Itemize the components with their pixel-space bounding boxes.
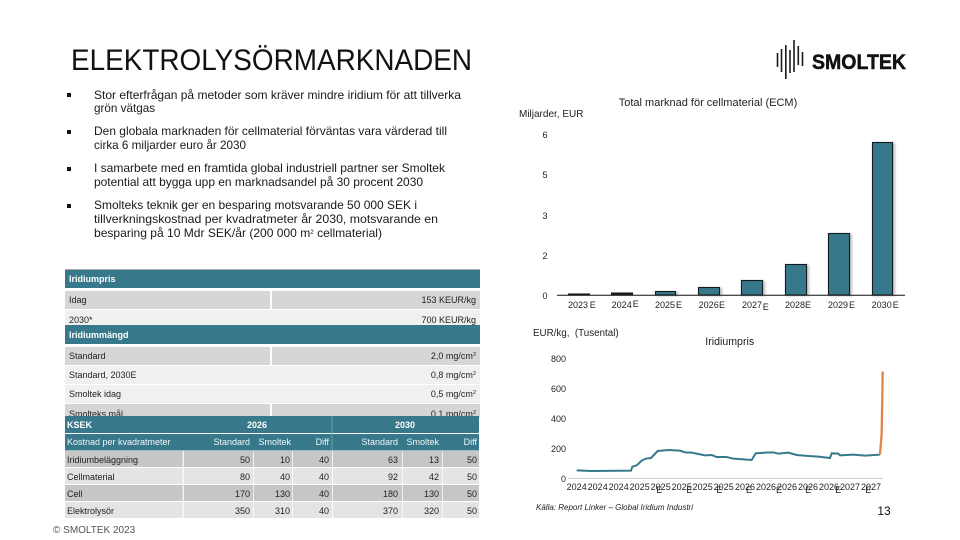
row: Elektrolysör: 310 <box>275 506 290 516</box>
y axis labels: 800 <box>551 354 566 364</box>
table: KSEK cost per square metre: 2030 <box>395 420 415 430</box>
x axis labels: E <box>805 485 811 495</box>
row: Iridiumbeläggning: 10 <box>280 455 290 465</box>
table: Iridiummängd: 2,0 mg/cm <box>431 351 473 361</box>
bullet list: potential att bygga upp en marknadsandel på 30 procent 2030 <box>94 176 424 189</box>
logo: Smoltek: SMOLTEK <box>812 50 906 74</box>
table: KSEK cost per square metre <box>65 416 479 518</box>
x axis labels: 2026 <box>819 482 839 492</box>
x axis labels: E <box>805 300 811 310</box>
title: ELEKTROLYSÖRMARKNADEN <box>71 44 472 77</box>
x axis labels: 2025 <box>630 482 650 492</box>
y axis labels: 6 <box>542 130 548 140</box>
row: Cell: 50 <box>467 489 477 499</box>
row: Elektrolysör: 350 <box>235 506 250 516</box>
x axis labels: 2026 <box>735 482 755 492</box>
table: KSEK cost per square metre: Kostnad per kvadratmeter <box>67 437 171 447</box>
x axis labels: E <box>716 485 722 495</box>
orange forecast line <box>880 372 883 455</box>
row: Cell <box>65 485 479 501</box>
table: KSEK cost per square metre: Standard <box>361 437 398 447</box>
table: Iridiummängd: 0,1 mg/cm <box>431 409 473 419</box>
x axis <box>557 294 905 296</box>
x axis labels: 2026 <box>777 482 797 492</box>
y axis labels: 5 <box>542 170 548 180</box>
row: Iridiumbeläggning: 50 <box>467 455 477 465</box>
table: Iridiumpris: Idag <box>69 295 87 305</box>
x axis labels: 2024 <box>588 482 608 492</box>
x axis labels: 2024 <box>567 482 587 492</box>
x axis labels: E <box>865 485 871 495</box>
y axis labels: 200 <box>551 444 566 454</box>
table: Iridiummängd: Iridiummängd <box>69 330 129 340</box>
row: Iridiumbeläggning: 63 <box>388 455 398 465</box>
y axis labels: 0 <box>542 291 548 301</box>
row: Iridiumbeläggning <box>65 451 479 467</box>
table: Iridiummängd: 0,8 mg/cm <box>431 370 473 380</box>
x axis labels: 2025 <box>714 482 734 492</box>
x axis labels: E <box>719 300 725 310</box>
row: Cellmaterial <box>65 468 479 484</box>
table: Iridiumpris: 2030* <box>69 315 93 325</box>
x axis labels: 2024 <box>609 482 629 492</box>
x axis labels: 2025 <box>655 300 675 310</box>
bar chart: total market for cell material <box>519 97 905 312</box>
row: Iridiumbeläggning: 50 <box>240 455 250 465</box>
bullet list: Smolteks teknik ger en besparing motsvarande 50 000 SEK i <box>94 199 417 212</box>
table: Iridiummängd: Standard <box>69 351 106 361</box>
x axis labels: 2026 <box>699 300 719 310</box>
row: Cell: 130 <box>424 489 439 499</box>
line chart: iridium price <box>533 328 883 495</box>
y axis labels: 3 <box>542 211 548 221</box>
bullet list: Den globala marknaden för cellmaterial förväntas vara värderad till <box>94 125 447 138</box>
y axis unit: Miljarder, EUR <box>519 109 583 120</box>
row: Cellmaterial: Cellmaterial <box>67 472 115 482</box>
row: Iridiumbeläggning: 40 <box>319 455 329 465</box>
x axis labels: E <box>776 485 782 495</box>
row: Iridiumbeläggning: 13 <box>429 455 439 465</box>
table: Iridiummängd: Smoltek idag <box>69 389 121 399</box>
x axis labels: 2027 <box>861 482 881 492</box>
table: Iridiummängd: 2 <box>473 352 476 358</box>
x axis <box>568 478 883 480</box>
chart title: Total marknad för cellmaterial (ECM) <box>619 97 797 109</box>
row: Elektrolysör: 320 <box>424 506 439 516</box>
x axis labels: E <box>763 302 769 312</box>
row: Cellmaterial: 50 <box>467 472 477 482</box>
y axis labels <box>551 354 566 484</box>
bar shadows <box>656 143 895 296</box>
row: Cell: 170 <box>235 489 250 499</box>
x axis labels: E <box>849 300 855 310</box>
bullet list: tillverkningskostnad per kvadratmeter år 2030, motsvarande en <box>94 213 438 226</box>
row: Cell: 40 <box>319 489 329 499</box>
table: KSEK cost per square metre: Diff <box>316 437 329 447</box>
table: KSEK cost per square metre: 2026 <box>247 420 267 430</box>
source note: Källa: Report Linker – Global Iridium Industri <box>536 503 693 512</box>
x axis labels: 2026 <box>798 482 818 492</box>
x axis labels: 2028 <box>785 300 805 310</box>
table: Iridiummängd: 2 <box>473 410 476 416</box>
row: Elektrolysör <box>65 502 479 518</box>
row: Cellmaterial: 40 <box>319 472 329 482</box>
x axis labels: 2027 <box>840 482 860 492</box>
x axis labels: 2024 <box>612 300 632 310</box>
table: Iridiummängd: 0,5 mg/cm <box>431 389 473 399</box>
y axis labels: 0 <box>561 474 566 484</box>
x axis labels: 2023 <box>568 300 588 310</box>
y axis labels <box>542 130 548 301</box>
table: KSEK cost per square metre: Diff <box>464 437 477 447</box>
x axis labels: E <box>686 485 692 495</box>
bullet list: I samarbete med en framtida global industriell partner ser Smoltek <box>94 162 445 175</box>
x axis labels: E <box>893 300 899 310</box>
x axis labels: E <box>633 299 639 309</box>
table: KSEK cost per square metre: KSEK <box>67 420 93 430</box>
bullet list: 2 <box>310 230 314 236</box>
row: Elektrolysör: 370 <box>383 506 398 516</box>
x axis labels: 2027 <box>742 300 762 310</box>
row: Elektrolysör: 40 <box>319 506 329 516</box>
x axis labels: 2025 <box>672 482 692 492</box>
bullet list: besparing på 10 Mdr SEK/år (200 000 m <box>94 227 304 240</box>
row: Cellmaterial: 92 <box>388 472 398 482</box>
x axis labels: 2025 <box>651 482 671 492</box>
table: Iridiummängd <box>65 325 480 419</box>
x axis labels: E <box>746 485 752 495</box>
row: Cell: Cell <box>67 489 83 499</box>
table: Iridiummängd: 2 <box>473 390 476 396</box>
page number: 13 <box>877 504 891 518</box>
table: Iridiummängd: Smolteks mål <box>69 409 123 419</box>
table: KSEK cost per square metre: Smoltek <box>258 437 291 447</box>
row: Elektrolysör: 50 <box>467 506 477 516</box>
x axis labels: 2026 <box>756 482 776 492</box>
row: Cellmaterial: 40 <box>280 472 290 482</box>
x axis labels: E <box>656 485 662 495</box>
bullet list <box>67 89 461 240</box>
bullet list: cellmaterial) <box>314 227 382 240</box>
bars <box>568 142 892 295</box>
x axis labels: 2025 <box>693 482 713 492</box>
row: Iridiumbeläggning: Iridiumbeläggning <box>67 455 138 465</box>
bullet list: cirka 6 miljarder euro år 2030 <box>94 139 247 152</box>
x axis labels: E <box>590 300 596 310</box>
row: Cell: 180 <box>383 489 398 499</box>
table: Iridiummängd: 2 <box>473 371 476 377</box>
copyright footer: © SMOLTEK 2023 <box>53 525 136 536</box>
table: Iridiumpris: 700 KEUR/kg <box>421 315 476 325</box>
y axis unit: EUR/kg, (Tusental) <box>533 328 619 339</box>
teal price line <box>577 450 880 471</box>
x axis labels <box>568 299 899 312</box>
x axis labels <box>567 482 881 495</box>
x axis labels: E <box>835 485 841 495</box>
y axis labels: 400 <box>551 414 566 424</box>
bullet list: grön vätgas <box>94 102 155 115</box>
row: Cellmaterial: 80 <box>240 472 250 482</box>
table: Iridiumpris: 153 KEUR/kg <box>421 295 476 305</box>
table: KSEK cost per square metre: Standard <box>213 437 250 447</box>
row: Elektrolysör: Elektrolysör <box>67 506 114 516</box>
logo: Smoltek <box>778 40 906 79</box>
table: Iridiumpris <box>65 269 480 326</box>
chart title: Iridiumpris <box>705 336 754 348</box>
y axis labels: 600 <box>551 384 566 394</box>
row: Cellmaterial: 42 <box>429 472 439 482</box>
table: Iridiummängd: Standard, 2030E <box>69 370 137 380</box>
y axis labels: 2 <box>542 251 548 261</box>
x axis labels: 2029 <box>828 300 848 310</box>
table: Iridiumpris: Iridiumpris <box>69 274 116 284</box>
table: KSEK cost per square metre: Smoltek <box>406 437 439 447</box>
row: Cell: 130 <box>275 489 290 499</box>
x axis labels: 2030 <box>872 300 892 310</box>
x axis labels: E <box>676 300 682 310</box>
bullet list: Stor efterfrågan på metoder som kräver mindre iridium för att tillverka <box>94 89 461 102</box>
